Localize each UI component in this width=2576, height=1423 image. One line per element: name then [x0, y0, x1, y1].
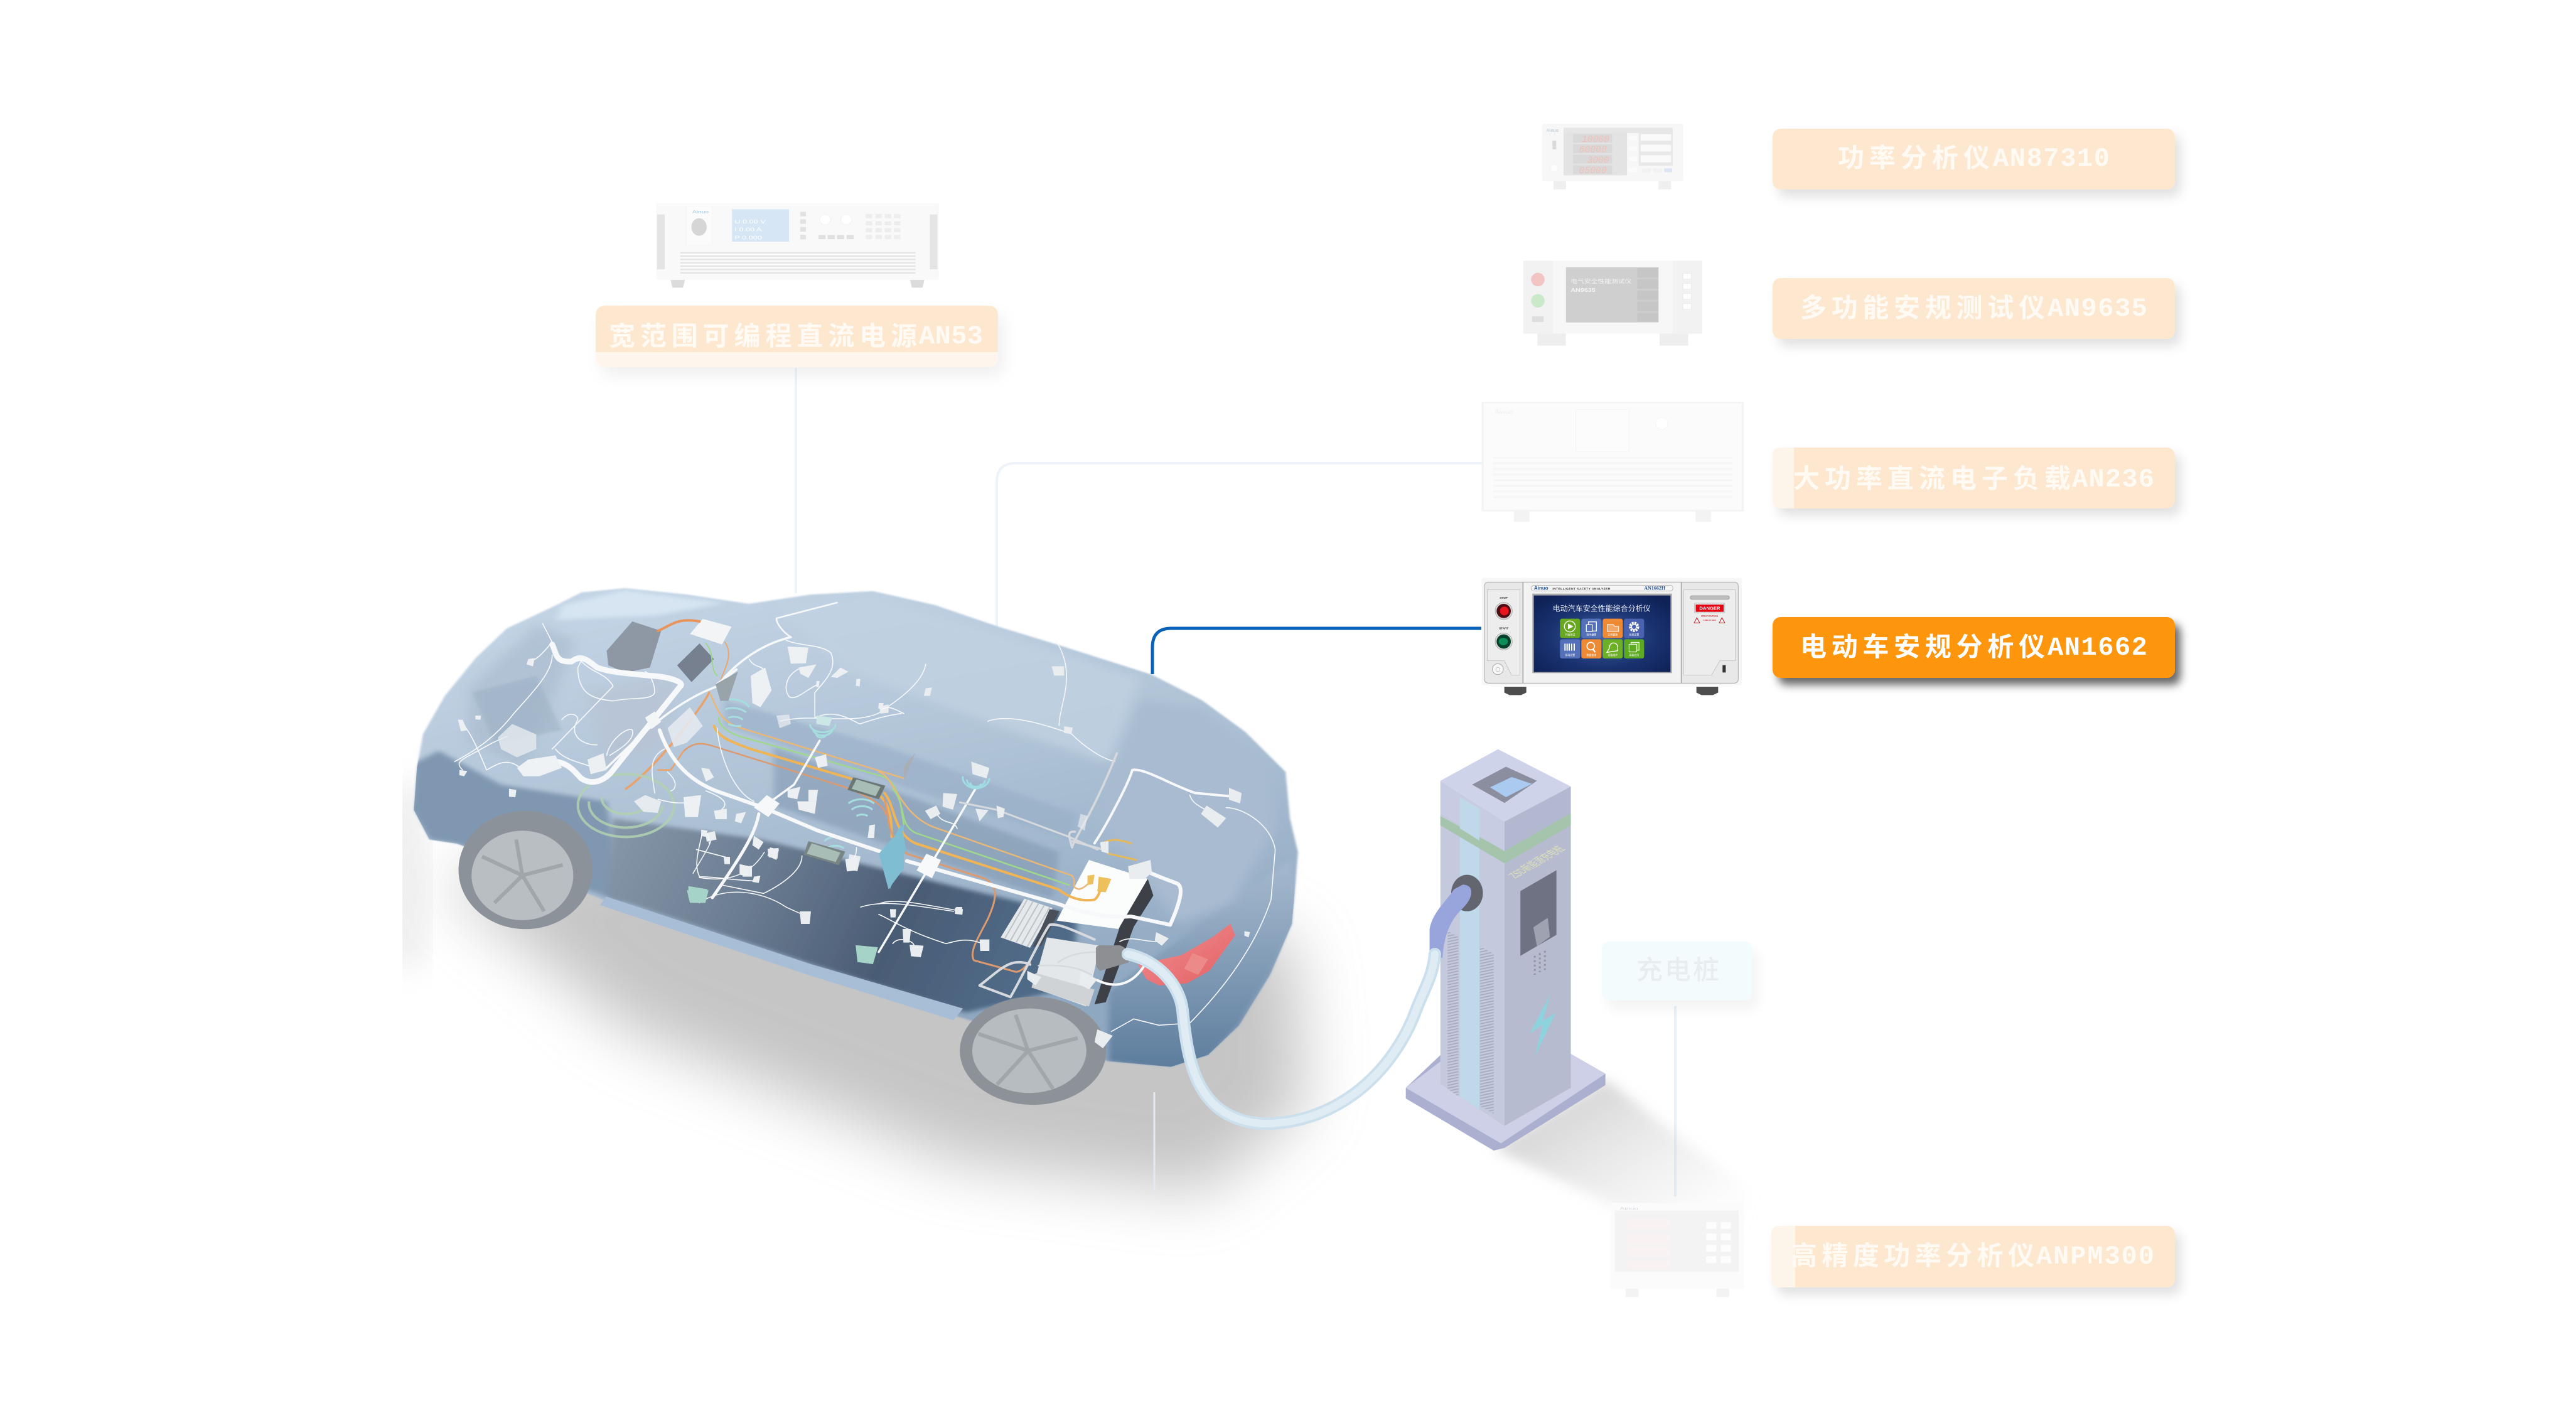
chassis [1483, 402, 1743, 511]
label solid area [596, 306, 998, 352]
screen title: 电动汽车安全性能综合分析仪 [1553, 603, 1651, 613]
chassis [1482, 578, 1742, 685]
product line: INTELLIGENT SAFETY ANALYZER [1552, 587, 1611, 591]
feet [1514, 511, 1711, 522]
connector line: electronic load to car [997, 463, 1483, 631]
window band [723, 701, 1072, 826]
usb port [1722, 665, 1726, 673]
thin white wires [454, 623, 904, 893]
green light band [1441, 813, 1571, 863]
instrument: programmable DC source [656, 203, 939, 287]
pile left face [1441, 813, 1505, 1126]
label: EV safety analyzer AN1662 (selected) [1773, 617, 2175, 678]
knob [1655, 417, 1668, 429]
keypad [866, 214, 900, 239]
long fuse block [751, 667, 771, 707]
roof highlight [888, 650, 1134, 761]
relay block [788, 647, 808, 663]
green ground rings [578, 774, 674, 837]
brand text: Ainuo [692, 209, 709, 214]
label faded left strip [1771, 1226, 1795, 1287]
menu icon: program edit [1581, 619, 1601, 638]
readouts [1627, 1218, 1670, 1269]
pile cap [1441, 781, 1505, 851]
model name: AN1662H [1644, 586, 1666, 591]
charging gun [1430, 884, 1471, 958]
high voltage note: HIGH VOLTAGE [1701, 615, 1719, 618]
key panel [1639, 133, 1673, 166]
dark door panels [608, 819, 1078, 1012]
thin rear wires [879, 795, 1275, 1031]
connector line: power supply to car [795, 368, 797, 593]
label text: 充电桩 [1636, 955, 1719, 985]
right inner panel [1684, 589, 1736, 675]
label model text: ANPM300 [2036, 1242, 2154, 1272]
label background [1771, 1226, 2175, 1287]
rack handles [657, 215, 938, 269]
rear wheel [960, 997, 1106, 1105]
tablet left [879, 824, 904, 889]
menu icon: barcode: 条码设置 [1565, 653, 1575, 657]
battery box black side [1095, 879, 1153, 1004]
brand: Ainuo [1620, 1206, 1638, 1211]
menu icon: maintenance: 设备维护 [1607, 653, 1618, 657]
feet [1537, 334, 1688, 346]
coloured cables [879, 772, 1137, 972]
brand strip [1531, 585, 1673, 591]
usb port [1552, 141, 1556, 149]
label background [1773, 129, 2175, 190]
power knob [1550, 164, 1558, 171]
menu icon: program edit: 程序编辑 [1586, 632, 1596, 636]
feet [1554, 181, 1671, 190]
roof cable clip [717, 670, 736, 684]
rocker panel [600, 896, 963, 1020]
engine shade [588, 675, 674, 768]
pile base [1406, 1049, 1606, 1151]
harness colour wires [626, 620, 904, 837]
card reader panel [1520, 870, 1557, 956]
label chinese text: 电动车安规分析仪 [1800, 632, 2045, 662]
function keys [818, 235, 854, 239]
bracket connector [645, 711, 661, 729]
readout two: 60000 [1579, 146, 1607, 156]
bottom keys [1643, 168, 1661, 172]
display power: P 0.000 [734, 235, 762, 241]
screen menu [1637, 268, 1658, 321]
label chinese text: 功率分析仪 [1838, 143, 1990, 173]
soft body shading [411, 590, 1301, 1071]
lower bracket [1031, 973, 1095, 1006]
wireless rings [722, 699, 874, 849]
lower connector block [684, 795, 701, 817]
start label: START [1499, 627, 1508, 630]
instrument: safety tester AN9635 [1523, 260, 1702, 346]
label: charging pile [1602, 942, 1752, 1001]
speaker dots [1535, 951, 1545, 975]
pile cap top [1441, 749, 1571, 822]
central connector cluster [667, 707, 703, 747]
car body shell [411, 588, 1301, 1105]
charging cable [1128, 954, 1435, 1124]
readout one: 10000 [1582, 135, 1609, 145]
readout windows [1573, 134, 1612, 174]
feet [1505, 687, 1718, 695]
menu icon: barcode [1560, 639, 1580, 658]
display [732, 209, 789, 242]
label model text: AN53 [919, 321, 983, 352]
corrugated hose [542, 645, 681, 782]
white rear cables [1095, 770, 1229, 843]
label: safety tester AN9635 [1773, 278, 2175, 339]
label faded left strip [1773, 448, 1794, 508]
engine shapes [472, 676, 562, 743]
menu icon: data search [1581, 639, 1601, 658]
right keys [1683, 274, 1692, 309]
key rows [1641, 134, 1671, 163]
menu icon: data search: 数据查询 [1586, 653, 1596, 657]
lower module [1033, 937, 1100, 1006]
side columns [1523, 260, 1702, 334]
stop button [1495, 603, 1512, 620]
pile ground shadow [1494, 1080, 1751, 1243]
warning triangles [1694, 618, 1725, 623]
rear car harness and power modules [879, 753, 1275, 1048]
dark controller [1033, 909, 1060, 947]
start button [1495, 633, 1512, 650]
menu icon: document [1602, 619, 1623, 638]
charge plug [1096, 945, 1129, 971]
screen title: 电气安全性能测试仪 [1570, 278, 1632, 285]
menu icon: maintenance [1602, 639, 1623, 658]
label: high precision power analyzer ANPM300 [1771, 1226, 2175, 1287]
tail light lens [1184, 953, 1208, 975]
door connectors [687, 667, 1073, 964]
rear hatch glass [1132, 708, 1268, 921]
pile right face [1505, 813, 1571, 1126]
danger plate: DANGER [1699, 606, 1720, 611]
label model text: AN9635 [2047, 294, 2147, 324]
menu icon: settings: 系统设置 [1629, 632, 1639, 636]
left inner panel [1487, 589, 1520, 675]
chassis [656, 203, 939, 280]
center panel [1523, 582, 1681, 683]
screen [1566, 267, 1658, 323]
soft buttons [800, 212, 806, 239]
front car engine bay and harness [454, 603, 904, 898]
lower connector row [634, 795, 661, 813]
stop button [1531, 273, 1545, 286]
display [1576, 410, 1629, 452]
charging gun holster [1451, 875, 1483, 911]
connector line: charging pile to analyzer [1674, 1006, 1677, 1196]
feet [1626, 1289, 1729, 1297]
battery box [1056, 860, 1148, 929]
chassis [1542, 124, 1683, 181]
teal module [689, 886, 707, 898]
lightning icon [1530, 994, 1555, 1056]
readout three: 3000 [1587, 156, 1609, 166]
instrument: high precision power analyzer ANPM300 [1611, 1203, 1744, 1297]
vent slots [680, 253, 915, 273]
menu icon: document: 文档管理 [1607, 632, 1618, 636]
main trunk [907, 861, 1181, 925]
dash panel [716, 672, 738, 701]
power button [1493, 663, 1503, 675]
label background [1773, 278, 2175, 339]
yellow connectors [1088, 874, 1112, 893]
danger plate [1694, 603, 1725, 613]
card slot [1690, 596, 1729, 599]
brand panel [687, 206, 712, 245]
right panel [1682, 582, 1738, 683]
car ground shadow [392, 785, 1306, 1193]
rear lower body [1108, 861, 1301, 1071]
connector line: lower faint [1154, 1092, 1155, 1194]
rotary switch [691, 218, 707, 236]
brand: Ainuo [1546, 129, 1559, 133]
label chinese text: 宽范围可编程直流电源 [609, 321, 917, 351]
vents [1493, 458, 1732, 497]
label: programmable DC source [596, 306, 998, 367]
pile light blue stripe [1460, 825, 1479, 1109]
menu icon: start test: 开始测试 [1565, 632, 1575, 636]
knobs [820, 215, 830, 225]
shift key [1664, 168, 1672, 172]
label chinese text: 大功率直流电子负载 [1793, 464, 2071, 493]
label chinese text: 高精度功率分析仪 [1791, 1241, 2034, 1270]
tail light [1138, 924, 1235, 985]
status strip [1564, 127, 1673, 133]
display column [1564, 133, 1627, 175]
finned heat sink [1001, 899, 1053, 948]
label: DC electronic load AN236 [1773, 448, 2175, 508]
screen [1534, 596, 1670, 672]
lower phone display [807, 843, 840, 862]
label: power analyzer AN87310 [1773, 129, 2175, 190]
readout four: 05000 [1579, 166, 1607, 176]
front lower fender [411, 751, 625, 903]
brand: Ainuo [1495, 409, 1513, 416]
label background [1602, 942, 1752, 1001]
control module [677, 643, 714, 682]
lower window band [774, 746, 1059, 899]
thin trunk [879, 789, 975, 952]
door wires [693, 641, 1115, 916]
car body [414, 588, 1298, 1067]
trunk branch up [765, 741, 820, 805]
charging pile [1406, 749, 1606, 1151]
F keys [1629, 136, 1637, 172]
menu icon: advanced: 高级应用 [1629, 653, 1639, 657]
trunk junction [754, 795, 780, 817]
display readings: U 0.00 V [734, 219, 766, 225]
menu icon: advanced [1624, 639, 1644, 658]
soft keys [1706, 1222, 1731, 1263]
label model text: AN1662 [2047, 633, 2147, 663]
tablet [881, 824, 906, 889]
menu icon: start test [1560, 619, 1580, 638]
pile cap blue strip [1460, 797, 1479, 840]
chassis [1523, 260, 1702, 334]
connectors [890, 788, 1250, 1048]
pile brand text: ZSD新能源充电桩 [1506, 845, 1568, 880]
start button [1531, 294, 1545, 308]
screen bezel [1532, 594, 1672, 673]
cable to plug [1097, 965, 1145, 985]
label model text: AN236 [2072, 464, 2154, 495]
stop label: STOP [1500, 596, 1508, 599]
gray cables [960, 753, 1117, 997]
pile top screen display [1490, 777, 1532, 797]
feet [670, 280, 925, 287]
display [1615, 1211, 1739, 1272]
screen model: AN9635 [1570, 287, 1596, 294]
left panel [1484, 582, 1523, 683]
phones [847, 777, 885, 799]
wireless rings [963, 776, 989, 788]
small connectors [458, 658, 884, 883]
main trunk cable [660, 730, 881, 852]
display current: I 0.00 A [734, 227, 762, 233]
left connector cluster [498, 724, 536, 758]
hood shade [471, 626, 572, 759]
knob current [841, 215, 852, 225]
hose clamp cluster [588, 753, 607, 774]
label background [1773, 448, 2175, 508]
wireless marker [971, 761, 989, 778]
charging cable core [1128, 954, 1435, 1124]
active connector line: safety analyzer to car [1152, 628, 1481, 674]
roof arc cable [607, 637, 791, 768]
fuse box [690, 619, 732, 645]
instrument: power analyzer AN87310 [1542, 124, 1683, 190]
heat sink fins [1005, 899, 1049, 947]
instrument: EV safety analyzer AN1662 [1482, 578, 1742, 695]
brand name: Ainuo [1534, 586, 1548, 591]
phone display [852, 780, 881, 796]
label chinese text: 多功能安规测试仪 [1800, 293, 2045, 323]
hood highlight [557, 590, 724, 620]
instrument: DC electronic load AN236 [1483, 402, 1743, 522]
pile top screen [1472, 767, 1537, 803]
label model text: AN87310 [1993, 144, 2110, 174]
pile side vents [1447, 931, 1494, 1114]
menu icon: settings [1624, 619, 1644, 638]
card icon [1533, 918, 1550, 947]
usb port [1532, 316, 1543, 322]
label background [1773, 617, 2175, 678]
trunk junction [916, 854, 941, 878]
label background [596, 306, 998, 367]
battery [607, 621, 661, 673]
lower phone [803, 841, 845, 865]
front wheel [458, 811, 593, 929]
roof cable [776, 603, 837, 637]
tablet frame [904, 753, 915, 780]
trunk branch down [712, 814, 759, 898]
voltage ratings: 5.0kV AC MAX [1704, 619, 1716, 621]
chassis [1611, 1203, 1744, 1289]
pile cap right side [1505, 787, 1571, 851]
corrugated duct joint [517, 755, 562, 776]
